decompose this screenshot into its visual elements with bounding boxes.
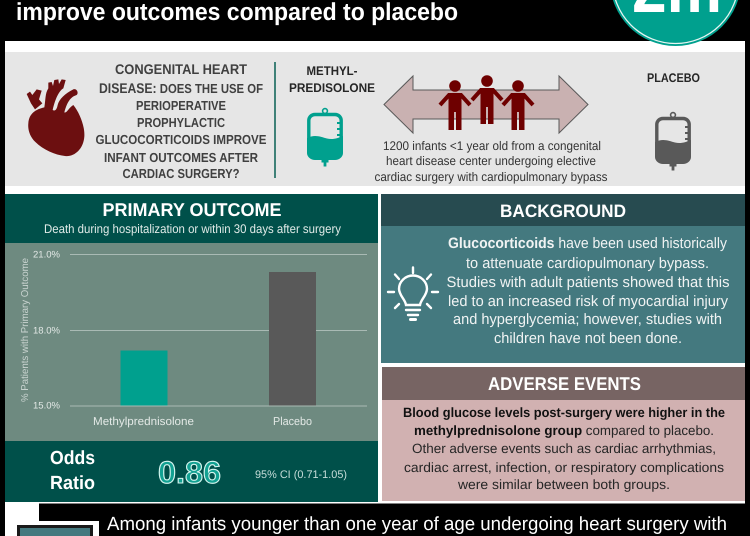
bar chart: 18.0% [33,326,61,336]
question text: INFANT OUTCOMES AFTER [104,150,259,165]
bar chart: % Patients with Primary Outcome [20,258,31,402]
primary outcome subheading: Death during hospitalization or within 30 days after surgery [44,222,342,236]
question text: DISEASE: DOES THE USE OF [99,80,263,96]
bar: placebo [269,272,316,406]
conclusion text: Among infants younger than one year of age undergoing heart surgery with [107,514,727,535]
bar chart: 15.0% [33,400,61,412]
question text: CONGENITAL HEART [115,61,247,77]
background text [446,235,730,347]
adverse events text: methylprednisolone group compared to placebo. [414,423,714,438]
title banner [0,0,750,41]
question text [96,61,267,181]
background text: and hyperglycemia; however, studies with [453,311,722,328]
odds ratio result: 0.86 [158,455,221,490]
adverse events text [403,405,725,492]
logo badge [610,0,741,46]
bar: methylprednisolone [120,350,168,406]
adverse events text: were similar between both groups. [457,477,670,492]
odds ratio result: 95% CI (0.71-1.05) [255,469,347,481]
panel: background [381,194,745,363]
conclusion banner [18,504,750,536]
icon: three infants [440,75,533,130]
adverse events text: cardiac arrest, infection, or respiratory complications [404,460,724,475]
adverse events text: Blood glucose levels post-surgery were higher in the [403,405,725,420]
icon: gray IV bag [655,113,691,170]
icon: lightbulb [388,268,438,320]
background text: Studies with adult patients showed that this [446,274,730,291]
population caption: cardiac surgery with cardiopulmonary bypass [374,170,608,184]
panel: study design [5,52,745,186]
odds ratio result [5,441,378,502]
question text: GLUCOCORTICOIDS IMPROVE [96,132,267,147]
background text: children have not been done. [494,330,682,347]
methylprednisolone label [289,64,375,95]
odds ratio result: Odds [50,448,95,469]
background text: to attenuate cardiopulmonary bypass. [466,255,709,272]
background text: led to an increased risk of myocardial injury [448,293,728,310]
background heading: BACKGROUND [500,201,626,221]
methylprednisolone label: PREDISOLONE [289,81,375,95]
bar chart: Methylprednisolone [93,416,194,428]
placebo label: PLACEBO [647,71,700,85]
adverse events heading: ADVERSE EVENTS [488,373,641,394]
icon: teal IV bag [307,109,343,166]
background text: Glucocorticoids have been used historically [448,235,727,252]
arrow: double-headed [384,76,588,133]
bar chart: Placebo [273,416,312,428]
question text: PROPHYLACTIC [137,115,226,130]
methylprednisolone label: METHYL- [306,64,358,78]
odds ratio result: Ratio [50,473,95,494]
panel: adverse events [382,367,745,501]
population caption: heart disease center undergoing elective [386,154,596,168]
question text: PERIOPERATIVE [136,98,226,113]
bar chart: 21.0% [33,250,61,260]
conclusion icon box [18,526,92,536]
icon: heart [27,79,84,156]
primary outcome heading: PRIMARY OUTCOME [102,199,282,220]
bar chart [5,243,378,441]
adverse events text: Other adverse events such as cardiac arrhythmias, [412,441,716,456]
question text: CARDIAC SURGERY? [122,166,240,181]
population caption: 1200 infants <1 year old from a congenital [383,139,601,153]
population caption [374,139,608,184]
panel: primary outcome [5,194,378,502]
